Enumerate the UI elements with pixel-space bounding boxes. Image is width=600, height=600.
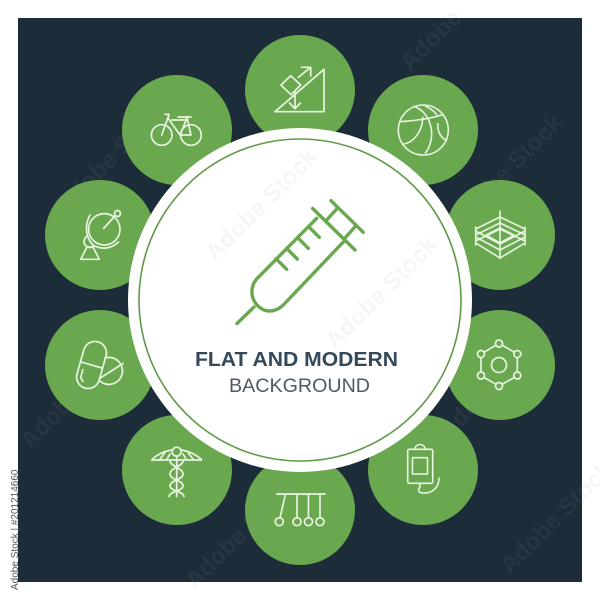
- icon: basketball: [398, 105, 448, 155]
- icon: boxing ring: [476, 211, 525, 258]
- icon: molecule: [478, 340, 521, 390]
- green circle: satellite dish: [45, 180, 155, 290]
- icon: caduceus: [152, 447, 202, 496]
- central white circle: [128, 128, 472, 472]
- stock watermarks: Adobe Stock: [445, 109, 568, 232]
- green circle: molecule: [445, 310, 555, 420]
- stock watermarks: Adobe Stock: [200, 143, 323, 266]
- green circle: caduceus: [122, 415, 232, 525]
- green circle: pendulum: [245, 455, 355, 565]
- stock watermarks: Adobe Stock: [433, 321, 556, 444]
- green circle: incline: [245, 35, 355, 145]
- icon: incline with forces: [275, 67, 324, 112]
- stock watermarks: Adobe Stock: [320, 231, 443, 354]
- icon: bicycle: [151, 114, 201, 145]
- title: FLAT AND MODERN: [195, 349, 398, 371]
- stock credit text: Adobe Stock | #201214660: [10, 469, 21, 590]
- stock watermarks: Adobe: [15, 382, 87, 454]
- stock watermarks: Adobe Stock: [180, 471, 303, 594]
- green circle: boxing ring: [445, 180, 555, 290]
- stock watermarks: Adobe: [395, 4, 467, 76]
- green circle: bicycle: [122, 75, 232, 185]
- central green ring: [139, 139, 461, 461]
- icon: pills: [74, 339, 123, 391]
- icon: satellite dish: [81, 210, 120, 259]
- icon: IV bag: [408, 444, 439, 493]
- green circle: IV bag: [368, 415, 478, 525]
- stock watermarks: Adobe Stock: [51, 95, 174, 218]
- green circle: basketball: [368, 75, 478, 185]
- green circle: pills: [45, 310, 155, 420]
- icon: pendulum balls: [275, 494, 325, 526]
- icon: syringe: [237, 201, 363, 324]
- subtitle: BACKGROUND: [229, 375, 370, 397]
